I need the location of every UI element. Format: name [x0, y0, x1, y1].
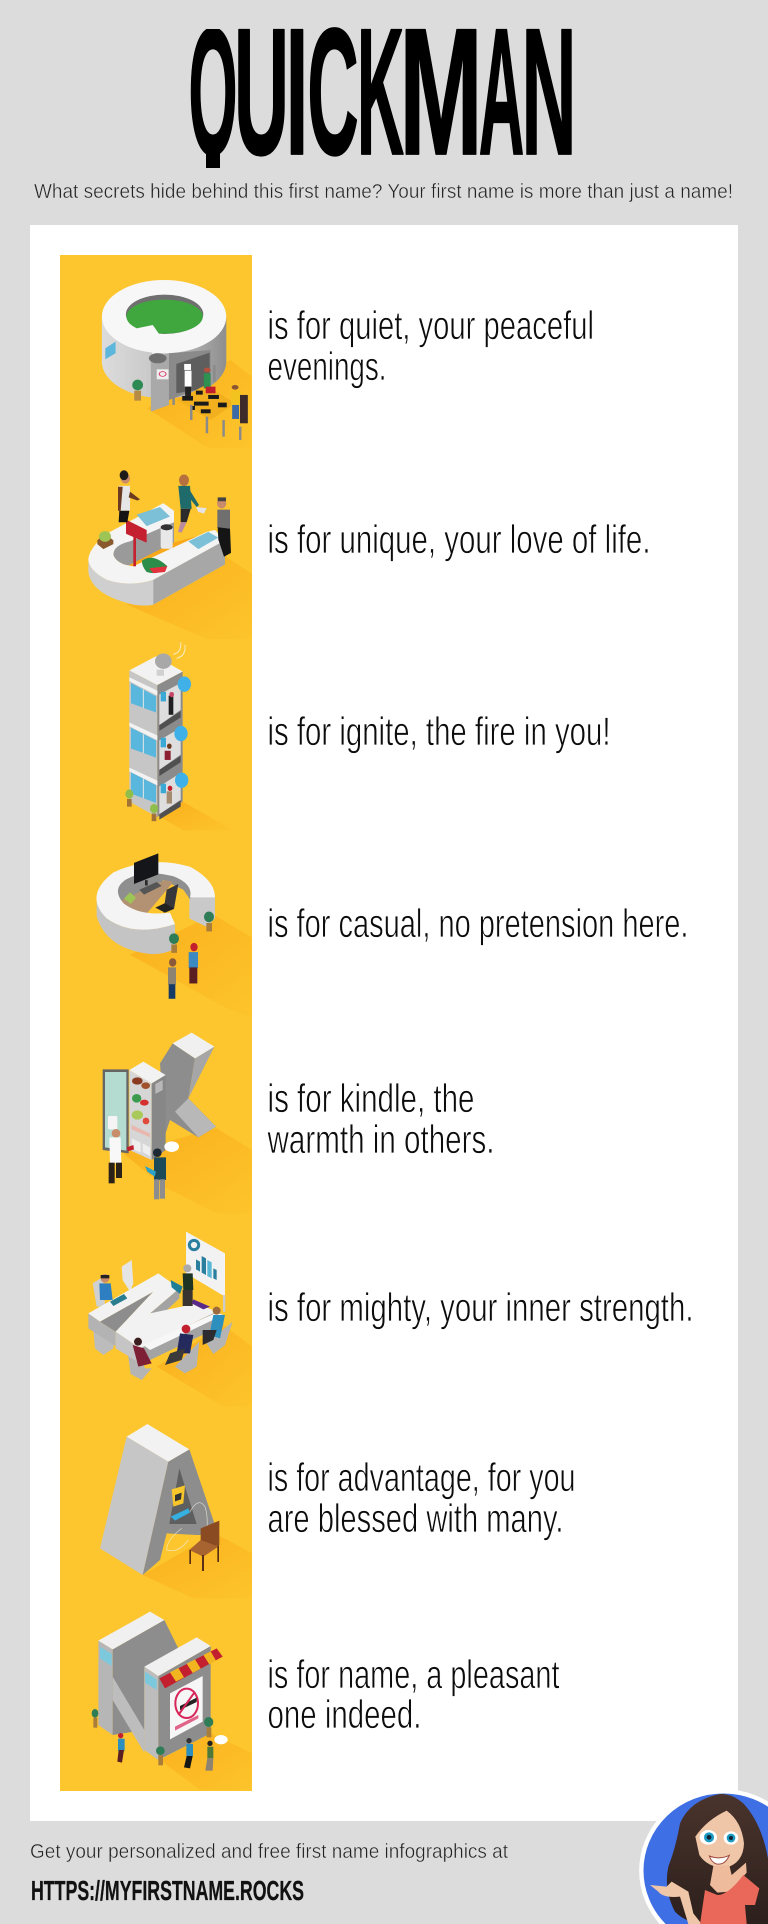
text: Q line: is for quiet, your peaceful: [268, 304, 594, 348]
icon: letter Q stadium: [102, 280, 252, 448]
text: A line: are blessed with many.: [268, 1497, 564, 1541]
text: Q line: evenings.: [268, 345, 386, 389]
icon: letter I office tower: [125, 642, 233, 830]
text: I line: is for ignite, the fire in you!: [268, 710, 610, 754]
footer url: HTTPS://MYFIRSTNAME.ROCKS: [31, 1875, 304, 1906]
text: K line: warmth in others.: [267, 1118, 494, 1162]
panel: white card: [30, 225, 738, 1821]
text: N line: is for name, a pleasant: [268, 1653, 560, 1697]
icon: avatar: [641, 1791, 768, 1924]
title: [190, 27, 572, 168]
subtitle: What secrets hide behind this first name? Your first name is more than just a name!: [34, 181, 733, 203]
icon: letter U restaurant counter: [88, 470, 252, 639]
text: K line: is for kindle, the: [268, 1077, 474, 1121]
footer text: Get your personalized and free first name infographics at: [30, 1841, 508, 1863]
icon: letter A workspace: [100, 1424, 252, 1598]
icon: letter M meeting table: [88, 1232, 252, 1407]
icon: letter K fridge: [103, 1033, 252, 1213]
icon: letter N shop: [92, 1612, 252, 1790]
panel: yellow illustration column: [60, 255, 252, 1791]
text: A line: is for advantage, for you: [268, 1456, 576, 1500]
icon: letter C reception desk: [96, 853, 252, 1018]
text: N line: one indeed.: [268, 1693, 422, 1737]
